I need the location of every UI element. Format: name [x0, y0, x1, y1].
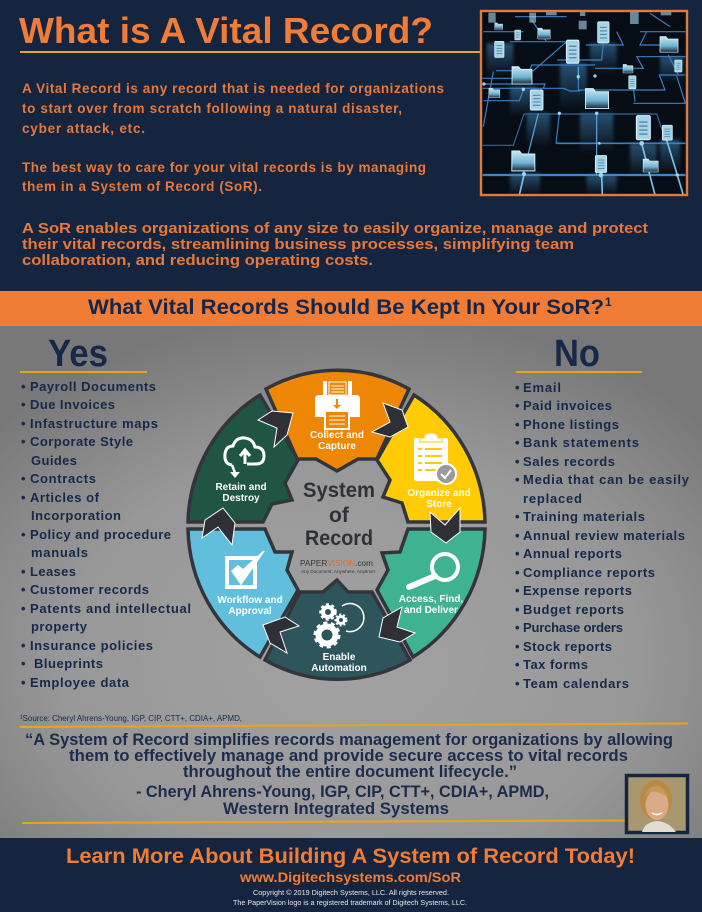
segment: retain and destroy: [188, 395, 298, 522]
segment: workflow and approval: [188, 529, 298, 657]
yes list: •: [21, 601, 26, 616]
yes list: •: [21, 656, 26, 671]
copyright: The PaperVision logo is a registered trademark of Digitech Systems, LLC.: [233, 900, 467, 907]
yes list: Insurance policies: [30, 638, 153, 653]
segment: retain and destroy: Retain and: [215, 482, 267, 493]
no list: •: [515, 528, 520, 543]
quote: Western Integrated Systems: [223, 800, 449, 818]
segment: collect and capture: Capture: [318, 441, 356, 452]
no list: •: [515, 509, 520, 524]
segment: retain and destroy: Destroy: [222, 493, 260, 504]
no list: •: [515, 546, 520, 561]
segment: enable automation: Automation: [311, 663, 367, 674]
yes list: •: [21, 675, 26, 690]
yes list: Patents and intellectual: [30, 601, 191, 616]
orange banner: What Vital Records Should Be Kept In Your SoR?: [88, 296, 604, 319]
segment: organize and store: Store: [426, 499, 452, 510]
yes list: property: [31, 619, 88, 634]
footer background: [0, 838, 702, 912]
title: What is A Vital Record?: [19, 10, 433, 51]
quote: them to effectively manage and provide secure access to vital records: [69, 747, 628, 765]
yes heading: Yes: [48, 333, 108, 375]
no list: Expense reports: [523, 583, 632, 598]
quote: - Cheryl Ahrens-Young, IGP, CIP, CTT+, CDIA+, APMD,: [136, 783, 549, 801]
no list: Media that can be easily: [523, 472, 690, 487]
wheel centre label: [303, 479, 375, 550]
yes list: •: [21, 379, 26, 394]
yes list: •: [21, 638, 26, 653]
no list: •: [515, 676, 520, 691]
yes list: Infastructure maps: [30, 416, 158, 431]
no list: •: [515, 380, 520, 395]
no list: Budget reports: [523, 602, 624, 617]
quote rule top: [20, 724, 688, 727]
no list: •: [515, 657, 520, 672]
yes list: Due Invoices: [30, 397, 115, 412]
no list: Paid invoices: [523, 398, 612, 413]
yes list: Guides: [31, 453, 77, 468]
segment: workflow and approval: Approval: [228, 606, 272, 617]
intro text: The best way to care for your vital records is by managing: [22, 160, 426, 175]
no heading: [516, 333, 642, 375]
quote rule bottom: [22, 820, 626, 823]
yes heading: [20, 333, 147, 375]
intro text: [22, 81, 444, 194]
yes list: •: [21, 527, 26, 542]
segment: enable automation: Enable: [323, 652, 356, 663]
yes list: Articles of: [30, 490, 100, 505]
image: network of files: [481, 11, 687, 195]
no list: •: [515, 417, 520, 432]
copyright: Copyright © 2019 Digitech Systems, LLC. All rights reserved.: [253, 889, 449, 897]
yes list: •: [21, 416, 26, 431]
system of record wheel: [188, 370, 485, 679]
intro text: to start over from scratch following a natural disaster,: [22, 101, 402, 116]
logo: paperVISION: [300, 559, 375, 574]
arrows between segments: [202, 403, 460, 653]
yes list: Policy and procedure: [30, 527, 171, 542]
yes list: Incorporation: [31, 508, 121, 523]
intro text: them in a System of Record (SoR).: [22, 179, 262, 194]
no list: •: [515, 435, 520, 450]
quote: throughout the entire document lifecycle.”: [183, 763, 517, 781]
no list: replaced: [523, 491, 582, 506]
quote: [25, 731, 673, 818]
segment: collect and capture: Collect and: [310, 430, 364, 441]
SoR description: their vital records, streamlining business processes, simplifying team: [22, 237, 574, 253]
yes list: •: [21, 582, 26, 597]
wheel centre label: of: [329, 504, 350, 527]
no list: Bank statements: [523, 435, 639, 450]
no heading: No: [554, 333, 600, 375]
copyright: [233, 889, 467, 907]
no list: •: [515, 565, 520, 580]
segment: access, find, and deliver: Access, Find,: [399, 594, 463, 605]
intro text: cyber attack, etc.: [22, 121, 145, 136]
no list: Sales records: [523, 454, 615, 469]
no list: Tax forms: [523, 657, 588, 672]
no list: Annual reports: [523, 546, 622, 561]
yes list: •: [21, 564, 26, 579]
yes list: Customer records: [30, 582, 149, 597]
header background: [0, 0, 702, 291]
yes list: •: [21, 434, 26, 449]
wheel centre label: System: [303, 479, 375, 502]
orange banner: 1: [605, 295, 612, 309]
no list: Team calendars: [523, 676, 629, 691]
no list: [515, 380, 690, 691]
yes list: Leases: [30, 564, 76, 579]
yes list: Corporate Style: [30, 434, 133, 449]
no list: Purchase orders: [523, 620, 623, 635]
no list: •: [515, 602, 520, 617]
logo: paperVISION: Any Document, Anywhere, Anytime!: [301, 569, 375, 574]
quote: “A System of Record simplifies records management for organizations by allowing: [25, 731, 673, 749]
SoR description: A SoR enables organizations of any size to easily organize, manage and protect: [22, 221, 648, 237]
footer call to action: www.Digitechsystems.com/SoR: [239, 870, 461, 885]
no list: Compliance reports: [523, 565, 655, 580]
yes list: •: [21, 397, 26, 412]
no list: •: [515, 398, 520, 413]
segment: access, find, and deliver: [377, 529, 485, 657]
no list: •: [515, 639, 520, 654]
source note: ¹Source: Cheryl Ahrens-Young, IGP, CIP, CTT+, CDIA+, APMD,: [20, 713, 242, 723]
no list: •: [515, 454, 520, 469]
portrait photo: [626, 776, 688, 832]
orange banner: [0, 291, 702, 326]
segment: collect and capture: [266, 370, 409, 471]
intro text: A Vital Record is any record that is needed for organizations: [22, 81, 444, 96]
SoR description: [22, 221, 648, 269]
no list: Training materials: [523, 509, 645, 524]
SoR description: collaboration, and reducing operating costs.: [22, 253, 373, 269]
yes list: Blueprints: [34, 656, 103, 671]
yes list: manuals: [31, 545, 88, 560]
gray panel background: [0, 326, 702, 838]
wheel centre label: Record: [305, 527, 373, 550]
no list: Annual review materials: [523, 528, 685, 543]
footer call to action: [66, 845, 635, 885]
no list: Email: [523, 380, 561, 395]
no list: •: [515, 472, 520, 487]
yes list: Contracts: [30, 471, 96, 486]
yes list: [21, 379, 191, 690]
yes list: Payroll Documents: [30, 379, 156, 394]
yes list: •: [21, 490, 26, 505]
footer call to action: Learn More About Building A System of Record Today!: [66, 845, 635, 868]
segment: organize and store: [377, 395, 485, 522]
yes list: Employee data: [30, 675, 130, 690]
logo: paperVISION: PAPERVISION.com: [300, 559, 373, 568]
no list: Stock reports: [523, 639, 612, 654]
no list: •: [515, 620, 520, 635]
no list: •: [515, 583, 520, 598]
no list: Phone listings: [523, 417, 619, 432]
yes list: •: [21, 471, 26, 486]
segment: workflow and approval: Workflow and: [217, 595, 283, 606]
segment: access, find, and deliver: and Deliver: [404, 605, 458, 616]
segment: enable automation: [265, 580, 410, 679]
segment: organize and store: Organize and: [407, 488, 471, 499]
